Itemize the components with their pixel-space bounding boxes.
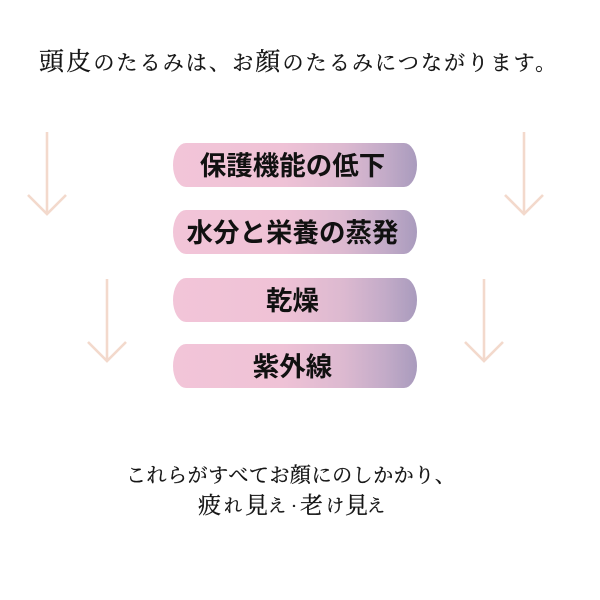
closing text line 1: これらがすべてお顔にのしかかり、 bbox=[126, 463, 455, 487]
closing text line 2: 見 bbox=[345, 493, 368, 518]
arrow: far left bbox=[27, 132, 67, 216]
closing text line 2: · bbox=[291, 496, 297, 516]
closing text line 2: え bbox=[268, 496, 286, 516]
pill: evaporation of water and nutrients bbox=[173, 210, 417, 254]
pill: reduced protective function: 保護機能の低下 bbox=[200, 151, 385, 181]
closing text line 2: え bbox=[367, 496, 385, 516]
pill: dryness bbox=[173, 278, 417, 322]
pill: reduced protective function bbox=[173, 143, 417, 187]
closing text line 2: 老 bbox=[300, 493, 323, 518]
pill: ultraviolet rays bbox=[173, 344, 417, 388]
closing text line 2: け bbox=[326, 496, 344, 516]
closing text line 2: 見 bbox=[245, 493, 268, 518]
closing text line 2: れ bbox=[224, 496, 242, 516]
pill: evaporation of water and nutrients: 水分と栄養の蒸発 bbox=[186, 218, 398, 248]
pill: ultraviolet rays: 紫外線 bbox=[253, 352, 332, 382]
closing text line 2: 疲 bbox=[198, 493, 221, 518]
arrow: inner left bbox=[87, 279, 127, 363]
arrow: far right bbox=[504, 132, 544, 216]
closing text line 2 bbox=[198, 493, 385, 518]
title: 頭皮のたるみは、お顔のたるみにつながります。 bbox=[39, 49, 558, 76]
arrow: inner right bbox=[464, 279, 504, 363]
pill: dryness: 乾燥 bbox=[266, 286, 319, 316]
